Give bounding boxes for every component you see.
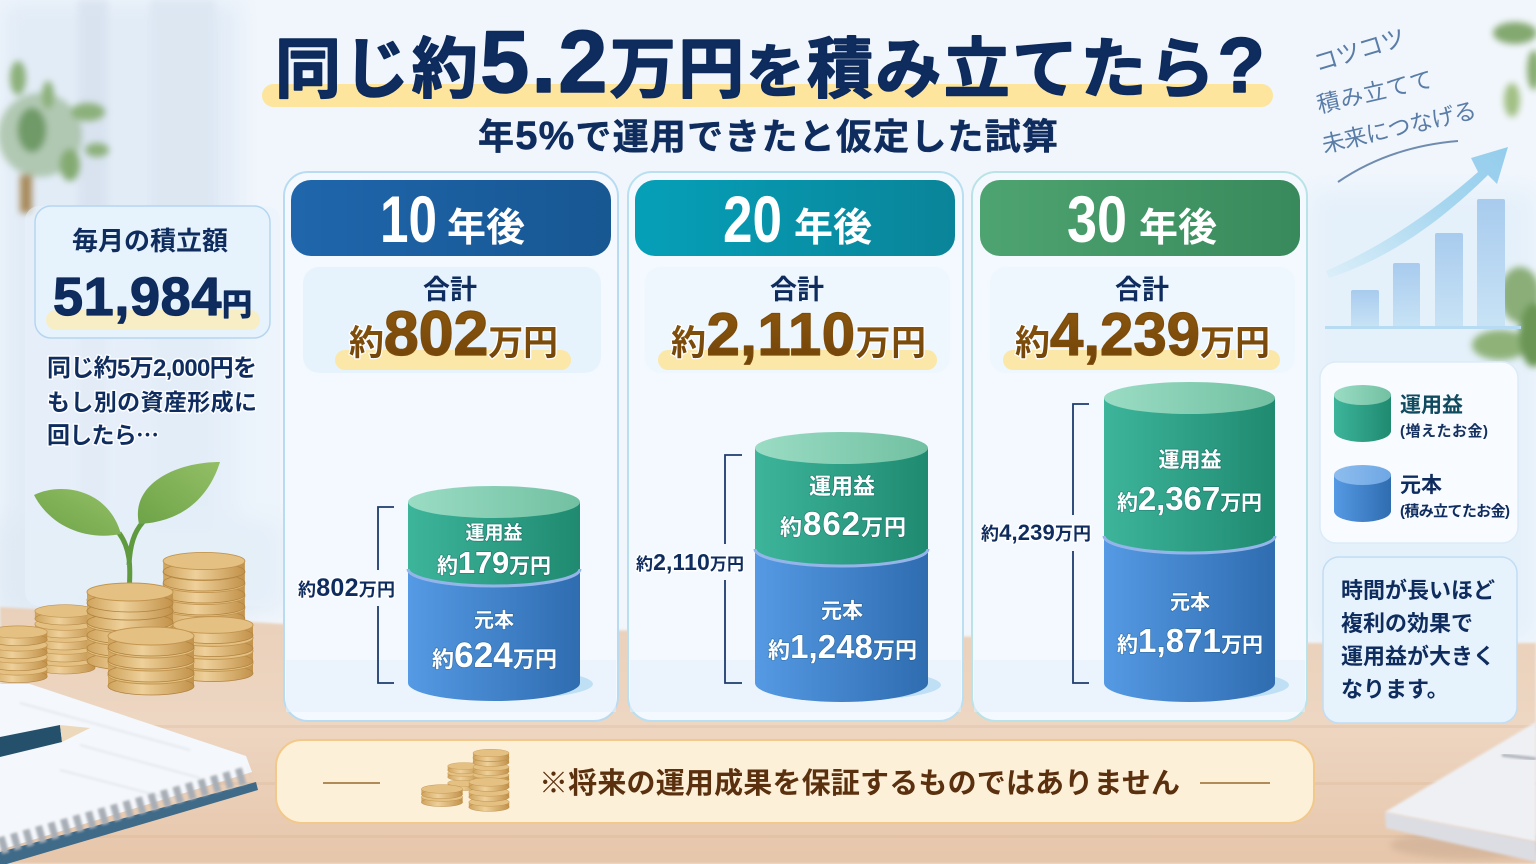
panel: monthly amount [25,206,280,606]
handwritten message: 積み立てて [1314,66,1435,118]
total box: 802: 合計 [423,275,477,305]
legend: principal: (積み立てたお金) [1400,502,1510,520]
title highlight bar [262,84,1273,107]
bracket: 802 [298,507,395,683]
legend: gain: (増えたお金) [1400,422,1488,440]
arrow [1326,147,1508,278]
bracket: 2,110: 約2,110万円 [636,549,744,575]
icon: coins [421,749,509,811]
cylinder chart: 20 years [755,432,941,702]
notebook and pen [0,684,258,864]
rising bar chart with arrow [1325,147,1521,329]
amount value: 51,984円 [53,267,252,327]
left description text [47,355,257,450]
header: 20 years: 年後 [794,207,872,250]
panel: 30 years [972,172,1307,721]
legend [1320,362,1518,543]
cylinder chart: 20 years: 運用益 [809,474,875,499]
disclaimer banner [276,740,1314,823]
cylinder chart: 10 years: 運用益 [465,522,523,544]
bracket: 4,239: 約4,239万円 [981,520,1091,545]
left description text: 回したら… [47,416,159,450]
header: 20 years [635,180,955,256]
cylinder chart: 20 years: 約862万円 [780,505,906,542]
bracket: 802: 約802万円 [298,574,395,602]
total box: 802: 約802万円 [349,299,558,369]
cylinder chart: 10 years: 約624万円 [432,636,557,675]
amount highlight [46,310,260,330]
panel: 20 years [628,172,963,721]
left description text: 同じ約5万2,000円を [47,355,257,382]
cylinder chart: 10 years: 約179万円 [437,545,551,580]
bracket: 2,110 [636,455,744,683]
header: 20 years: 20 [723,182,782,256]
cylinder chart: 30 years: 約2,367万円 [1117,480,1262,517]
title [262,12,1273,111]
header: 10 years [291,180,611,256]
panel: 10 years [284,172,618,721]
cylinder chart: 10 years [408,486,593,701]
bracket: 4,239 [981,404,1091,683]
curved stroke [1338,141,1458,182]
total box: 4,239 [990,267,1295,373]
disclaimer text: ※将来の運用成果を保証するものではありません [539,767,1180,800]
blurred plant top left [0,61,109,213]
left description text: もし別の資産形成に [47,389,257,415]
legend: principal: 元本 [1400,474,1442,497]
note box [1323,557,1517,723]
legend: gain: 運用益 [1400,394,1463,417]
note box: 複利の効果で [1341,611,1473,636]
cylinder chart: 30 years: 元本 [1170,591,1210,614]
legend: gain [1334,385,1488,442]
total box: 2,110: 約2,110万円 [671,301,926,368]
total box: 4,239: 合計 [1115,275,1169,305]
laptop [1385,722,1536,862]
header: 30 years: 30 [1067,182,1127,256]
subtitle: 年5%で運用できたと仮定した試算 [478,114,1058,158]
total box: 2,110 [645,267,950,373]
cylinder chart: 20 years: 約1,248万円 [768,628,917,665]
amount label: 毎月の積立額 [72,226,228,256]
handwritten message: コツコツ [1311,24,1409,78]
cylinder chart: 30 years [1104,382,1289,702]
icon: sprout [34,462,220,592]
handwritten message: 未来につなげる [1319,97,1479,158]
note box: 時間が長いほど [1341,578,1495,603]
cylinder chart: 10 years: 元本 [474,609,514,632]
note box: 運用益が大きく [1341,644,1495,669]
header: 10 years: 年後 [447,207,525,250]
icon: coin stacks [0,552,253,695]
header: 30 years: 年後 [1139,207,1217,250]
total box: 2,110: 合計 [770,275,824,305]
total box: 802 [303,267,601,373]
total box: 4,239: 約4,239万円 [1015,301,1270,368]
legend: principal [1334,465,1510,522]
header: 30 years [980,180,1300,256]
blurred leaves right [1472,22,1536,367]
note box: なります。 [1341,677,1449,702]
title text: 同じ約5.2万円を積み立てたら? [275,12,1265,111]
cylinder chart: 30 years: 約1,871万円 [1117,622,1263,659]
handwritten message [1311,24,1479,158]
header: 10 years: 10 [380,182,437,256]
cylinder chart: 30 years: 運用益 [1158,449,1222,472]
sprout on coins [0,462,253,695]
cylinder chart: 20 years: 元本 [821,600,863,623]
bars [1325,199,1521,329]
